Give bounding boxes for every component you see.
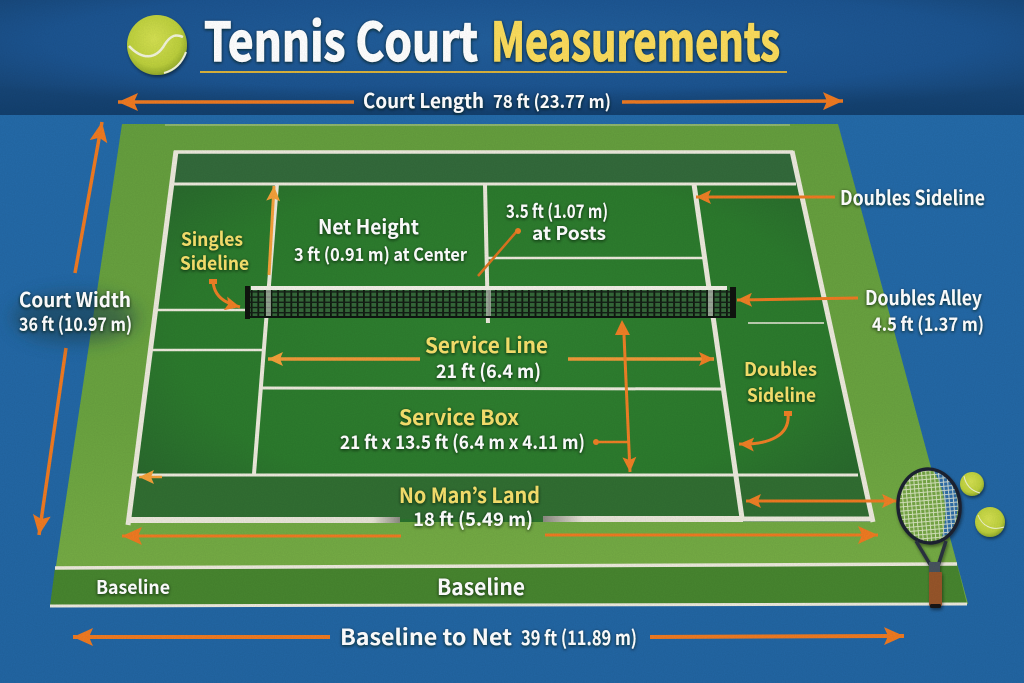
- callout: singles sideline: Singles: [181, 225, 243, 252]
- callout: doubles alley: Doubles Alley: [865, 282, 982, 311]
- icon: tennis racket: [895, 466, 963, 608]
- lower run-off band: [50, 564, 967, 606]
- dimension: court length: [118, 85, 843, 114]
- callout: doubles sideline lower: Doubles: [744, 355, 817, 382]
- callout: doubles alley: 4.5 ft (1.37 m): [872, 310, 984, 337]
- callout: doubles sideline lower: [739, 355, 817, 444]
- callout: doubles sideline upper: Doubles Sideline: [840, 182, 985, 211]
- title: Tennis Court: [204, 1, 478, 77]
- tennis net: [245, 286, 736, 319]
- callout: net height at center: [294, 211, 467, 267]
- title: [204, 1, 780, 77]
- background: header band: [0, 0, 1024, 115]
- callout: service line: 21 ft (6.4 m): [436, 357, 541, 384]
- callout: net height at center: 3 ft (0.91 m) at Center: [294, 241, 467, 267]
- dimension: court length: 78 ft (23.77 m): [493, 88, 611, 114]
- icon: title tennis ball: [127, 15, 187, 75]
- baseline label center: Baseline: [437, 570, 525, 602]
- title underline: [200, 71, 787, 73]
- baseline segment left: [128, 517, 400, 523]
- title: Measurements: [491, 1, 780, 77]
- court playing surface: [126, 152, 873, 522]
- callout: net height at posts: at Posts: [532, 219, 606, 246]
- dimension: court width: 36 ft (10.97 m): [19, 310, 132, 337]
- dimension: court length: Court Length: [363, 85, 484, 114]
- small left arrow on service baseline: [139, 476, 162, 478]
- callout: net height at center: Net Height: [318, 211, 420, 240]
- callout: service box: [340, 402, 585, 455]
- callout: singles sideline: [180, 186, 274, 307]
- outer court surround: [50, 124, 968, 606]
- callout: singles sideline: Sideline: [180, 249, 249, 276]
- callout: service box: Service Box: [399, 402, 519, 432]
- dimension: baseline to net: [73, 620, 904, 652]
- callout: no man's land: 18 ft (5.49 m): [413, 505, 533, 532]
- callout: no man's land: No Man’s Land: [399, 480, 540, 510]
- double arrow: alley to racket: [746, 500, 897, 502]
- dimension: baseline to net: Baseline to Net: [340, 620, 512, 652]
- callout: service line: Service Line: [425, 330, 548, 360]
- dimension: baseline to net: 39 ft (11.89 m): [521, 622, 637, 651]
- court lines: [50, 125, 967, 606]
- callout: net height at posts: [478, 197, 608, 276]
- baseline label left: Baseline: [96, 573, 170, 600]
- callout: doubles alley: [737, 282, 984, 337]
- icon: large tennis ball: [975, 507, 1005, 537]
- dimension: court width: Court Width: [19, 284, 131, 313]
- callout: service line: [268, 330, 714, 384]
- callout: no man's land: [122, 480, 878, 536]
- baseline segment right: [543, 516, 743, 522]
- callout: doubles sideline lower: Sideline: [747, 381, 816, 408]
- vertical service box arrow: [593, 320, 630, 472]
- callout: net height at posts: 3.5 ft (1.07 m): [506, 197, 608, 224]
- dimension: court width: [13, 122, 137, 535]
- callout: service box: 21 ft x 13.5 ft (6.4 m x 4.11 m): [340, 428, 585, 455]
- icon: small tennis ball: [960, 472, 984, 496]
